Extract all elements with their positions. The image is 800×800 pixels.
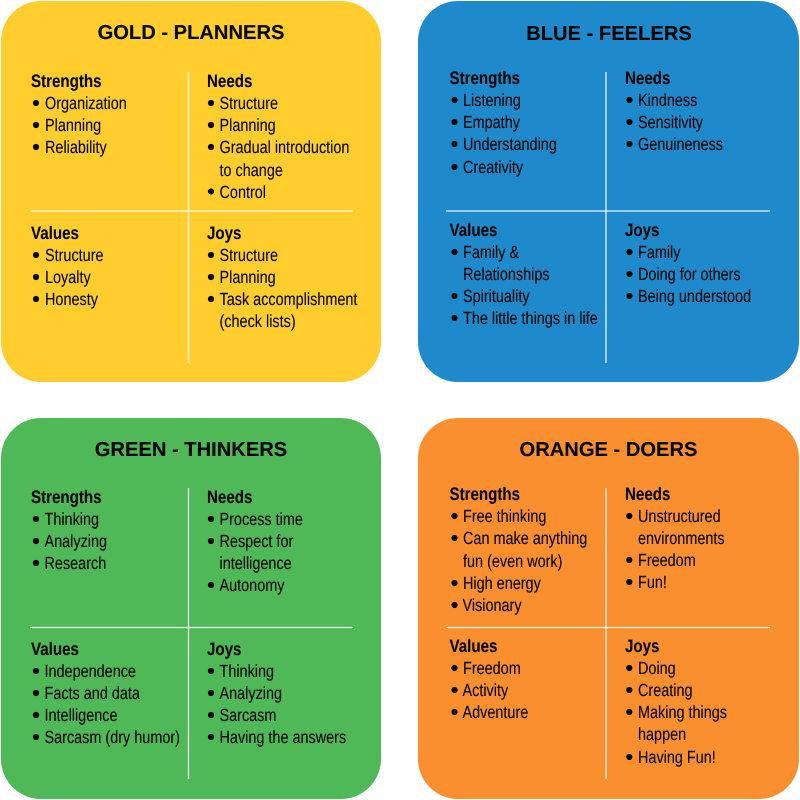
block: green joys: Sarcasm: [220, 705, 276, 725]
block: orange needs: [625, 484, 725, 592]
block: gold needs: [207, 71, 349, 202]
block: gold needs: Structure: [220, 93, 278, 113]
block: gold needs: Planning: [220, 115, 276, 135]
block: green values: Intelligence: [44, 705, 117, 725]
block: blue values: Relationships: [463, 264, 550, 284]
heading: green thinkers: GREEN - THINKERS: [95, 439, 287, 461]
block: gold values: [31, 223, 104, 309]
block: green needs: Respect for: [220, 531, 293, 551]
block: blue joys: Joys: [625, 220, 659, 240]
block: green values: Facts and data: [44, 683, 140, 703]
block: gold strengths: Organization: [45, 93, 127, 113]
block: orange joys: Doing: [638, 658, 676, 678]
block: gold strengths: Reliability: [45, 137, 107, 157]
block: orange strengths: Strengths: [450, 484, 520, 504]
panel: orange doers: [418, 418, 799, 799]
block: green joys: Joys: [207, 639, 241, 659]
block: green needs: intelligence: [220, 553, 292, 573]
block: green strengths: Research: [44, 553, 106, 573]
block: blue values: [450, 220, 598, 328]
block: orange joys: Joys: [625, 636, 659, 656]
block: orange joys: Making things: [638, 702, 727, 722]
block: green strengths: Strengths: [31, 487, 102, 507]
block: gold strengths: Planning: [45, 115, 101, 135]
block: orange strengths: Visionary: [462, 595, 522, 615]
block: orange needs: environments: [638, 528, 725, 548]
block: green strengths: Analyzing: [44, 531, 107, 551]
block: gold joys: Planning: [220, 267, 276, 287]
heading: orange doers: ORANGE - DOERS: [520, 439, 697, 461]
block: green joys: Thinking: [220, 661, 274, 681]
block: blue joys: Doing for others: [638, 264, 741, 284]
block: gold joys: Structure: [220, 245, 278, 265]
block: green values: Independence: [44, 661, 136, 681]
block: orange values: Values: [450, 636, 497, 656]
block: gold joys: (check lists): [220, 311, 296, 331]
block: green values: Sarcasm (dry humor): [44, 727, 180, 747]
heading: gold planners: GOLD - PLANNERS: [98, 22, 284, 44]
block: blue strengths: Creativity: [463, 157, 523, 177]
block: orange values: Adventure: [462, 702, 528, 722]
block: gold needs: Control: [220, 182, 266, 202]
block: blue strengths: Empathy: [463, 112, 520, 132]
block: blue values: Values: [450, 220, 497, 240]
block: blue values: Family &: [463, 242, 519, 262]
block: blue joys: Being understood: [638, 286, 751, 306]
panel: gold planners: [1, 1, 381, 382]
block: gold joys: [207, 223, 357, 331]
block: green values: Values: [31, 639, 79, 659]
block: blue needs: Genuineness: [638, 134, 723, 154]
block: orange joys: Having Fun!: [638, 747, 716, 767]
panel: blue feelers: [418, 1, 799, 382]
block: orange values: [450, 636, 528, 722]
block: orange needs: Fun!: [638, 572, 667, 592]
block: gold needs: to change: [220, 160, 283, 180]
block: blue values: The little things in life: [463, 308, 598, 328]
block: orange needs: Freedom: [638, 550, 696, 570]
block: orange joys: [625, 636, 727, 767]
block: gold strengths: [31, 71, 127, 157]
block: orange strengths: High energy: [463, 573, 541, 593]
block: blue needs: [625, 68, 723, 154]
block: gold values: Structure: [45, 245, 104, 265]
block: green needs: Process time: [220, 509, 303, 529]
block: green strengths: [31, 487, 107, 573]
block: gold strengths: Strengths: [31, 71, 102, 91]
block: orange needs: Needs: [625, 484, 670, 504]
block: gold joys: Joys: [207, 223, 241, 243]
block: blue joys: [625, 220, 751, 306]
block: blue strengths: [450, 68, 557, 177]
block: orange strengths: [450, 484, 587, 615]
block: orange strengths: Free thinking: [463, 506, 546, 526]
block: blue needs: Kindness: [638, 90, 698, 110]
block: gold values: Loyalty: [45, 267, 91, 287]
block: gold joys: Task accomplishment: [220, 289, 357, 309]
panel: green thinkers: [1, 418, 381, 799]
block: orange joys: happen: [638, 724, 686, 744]
block: blue values: Spirituality: [463, 286, 530, 306]
block: green needs: [207, 487, 303, 595]
block: green needs: Needs: [207, 487, 252, 507]
block: orange strengths: fun (even work): [463, 551, 562, 571]
block: green values: [31, 639, 180, 747]
block: gold needs: Needs: [207, 71, 252, 91]
block: orange strengths: Can make anything: [463, 528, 587, 548]
block: blue strengths: Strengths: [450, 68, 520, 88]
block: blue strengths: Understanding: [463, 134, 557, 154]
block: blue joys: Family: [638, 242, 681, 262]
block: green joys: Having the answers: [220, 727, 346, 747]
block: orange values: Freedom: [463, 658, 521, 678]
block: green needs: Autonomy: [220, 575, 285, 595]
block: gold needs: Gradual introduction: [220, 137, 349, 157]
block: green strengths: Thinking: [44, 509, 99, 529]
block: gold values: Values: [31, 223, 79, 243]
block: blue needs: Needs: [625, 68, 670, 88]
block: orange needs: Unstructured: [638, 506, 721, 526]
block: blue strengths: Listening: [463, 90, 521, 110]
block: gold values: Honesty: [45, 289, 98, 309]
heading: blue feelers: BLUE - FEELERS: [526, 23, 692, 45]
block: green joys: [207, 639, 346, 747]
block: orange values: Activity: [462, 680, 508, 700]
block: orange joys: Creating: [638, 680, 693, 700]
block: blue needs: Sensitivity: [638, 112, 703, 132]
block: green joys: Analyzing: [220, 683, 282, 703]
